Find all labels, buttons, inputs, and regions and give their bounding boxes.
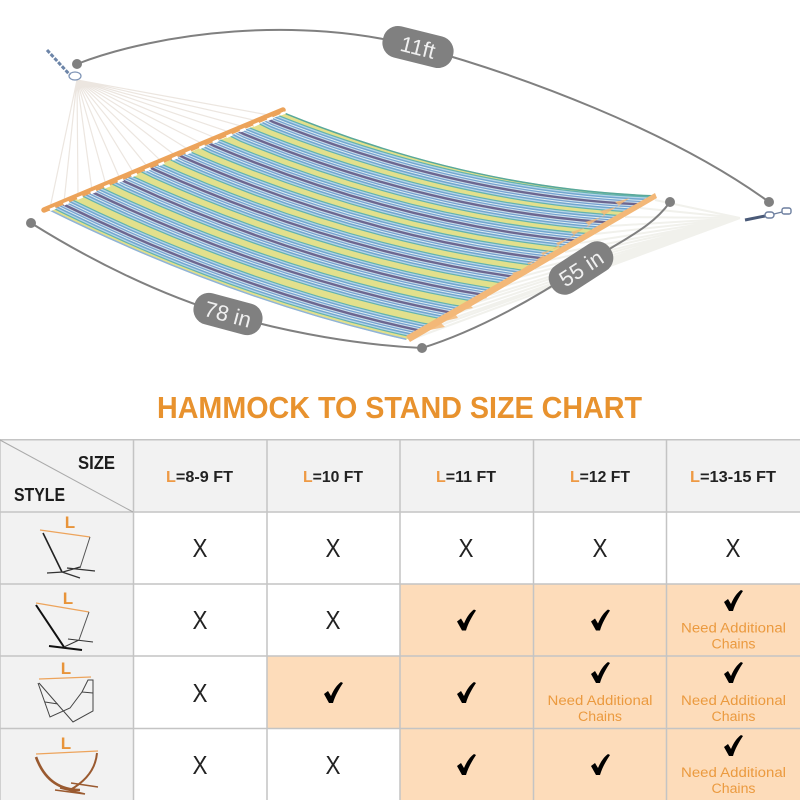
icon: stand style 3	[38, 659, 93, 722]
grid lines	[0, 440, 800, 800]
dimension: 11 ft: 11ft	[398, 31, 438, 64]
row 4 marks: Need Additional	[681, 765, 786, 780]
icon: stand style 1	[40, 513, 95, 578]
row 3 marks: X	[192, 678, 208, 708]
right spreader bar	[406, 193, 657, 342]
row 3 marks: Need Additional	[681, 693, 786, 708]
hammock illustration	[44, 50, 791, 342]
left chain and ring	[47, 50, 81, 80]
row 4 marks: X	[192, 750, 208, 780]
left ropes	[50, 80, 274, 208]
row 1 marks: X	[192, 533, 208, 563]
icon: stand style 4: L	[61, 734, 71, 753]
right ropes	[415, 200, 740, 338]
row 1 marks: X	[458, 533, 474, 563]
dimension: 78 in	[26, 218, 427, 353]
table: size chart	[0, 440, 800, 800]
row 2 marks: X	[326, 605, 340, 635]
row 2 marks: Need Additional	[681, 620, 786, 636]
column headers: L=8-9 FT	[166, 469, 233, 486]
right chain and ring	[745, 208, 791, 220]
cell backgrounds	[0, 440, 800, 800]
icon: stand style 2	[36, 589, 93, 650]
header: size / style: SIZE	[78, 453, 115, 473]
icon: stand style 4	[36, 734, 98, 794]
row 2 marks: Chains	[712, 636, 756, 652]
dimension: 78 in: 78 in	[202, 296, 254, 333]
dimension: 55 in: 55 in	[554, 245, 608, 292]
icon: stand style 1: L	[65, 513, 75, 532]
column headers: L=10 FT	[303, 469, 363, 486]
header: size / style: STYLE	[14, 485, 65, 505]
column headers: L=13-15 FT	[690, 469, 776, 486]
row 1 marks	[192, 533, 740, 563]
row 4 marks	[192, 735, 786, 796]
row 2 marks	[192, 590, 786, 652]
row 1 marks: X	[592, 533, 608, 563]
dimension: 55 in	[422, 197, 675, 348]
row 3 marks: Chains	[712, 709, 756, 724]
row 2 marks: X	[192, 605, 208, 635]
row 1 marks: X	[726, 533, 740, 563]
striped fabric	[47, 112, 655, 340]
row 4 marks: X	[326, 750, 340, 780]
column headers: L=12 FT	[570, 469, 630, 486]
header: size / style	[0, 440, 133, 512]
row 3 marks: Need Additional	[548, 693, 652, 708]
column headers	[166, 469, 776, 486]
left spreader bar	[44, 110, 285, 210]
icon: stand style 2: L	[63, 589, 73, 608]
row 3 marks	[192, 662, 786, 724]
row 4 marks: Chains	[712, 781, 756, 796]
title: HAMMOCK TO STAND SIZE CHART	[157, 390, 642, 425]
icon: stand style 3: L	[61, 659, 71, 678]
column headers: L=11 FT	[436, 469, 496, 486]
row 1 marks: X	[326, 533, 340, 563]
dimension: 11 ft	[72, 23, 774, 207]
row 3 marks: Chains	[578, 709, 622, 724]
